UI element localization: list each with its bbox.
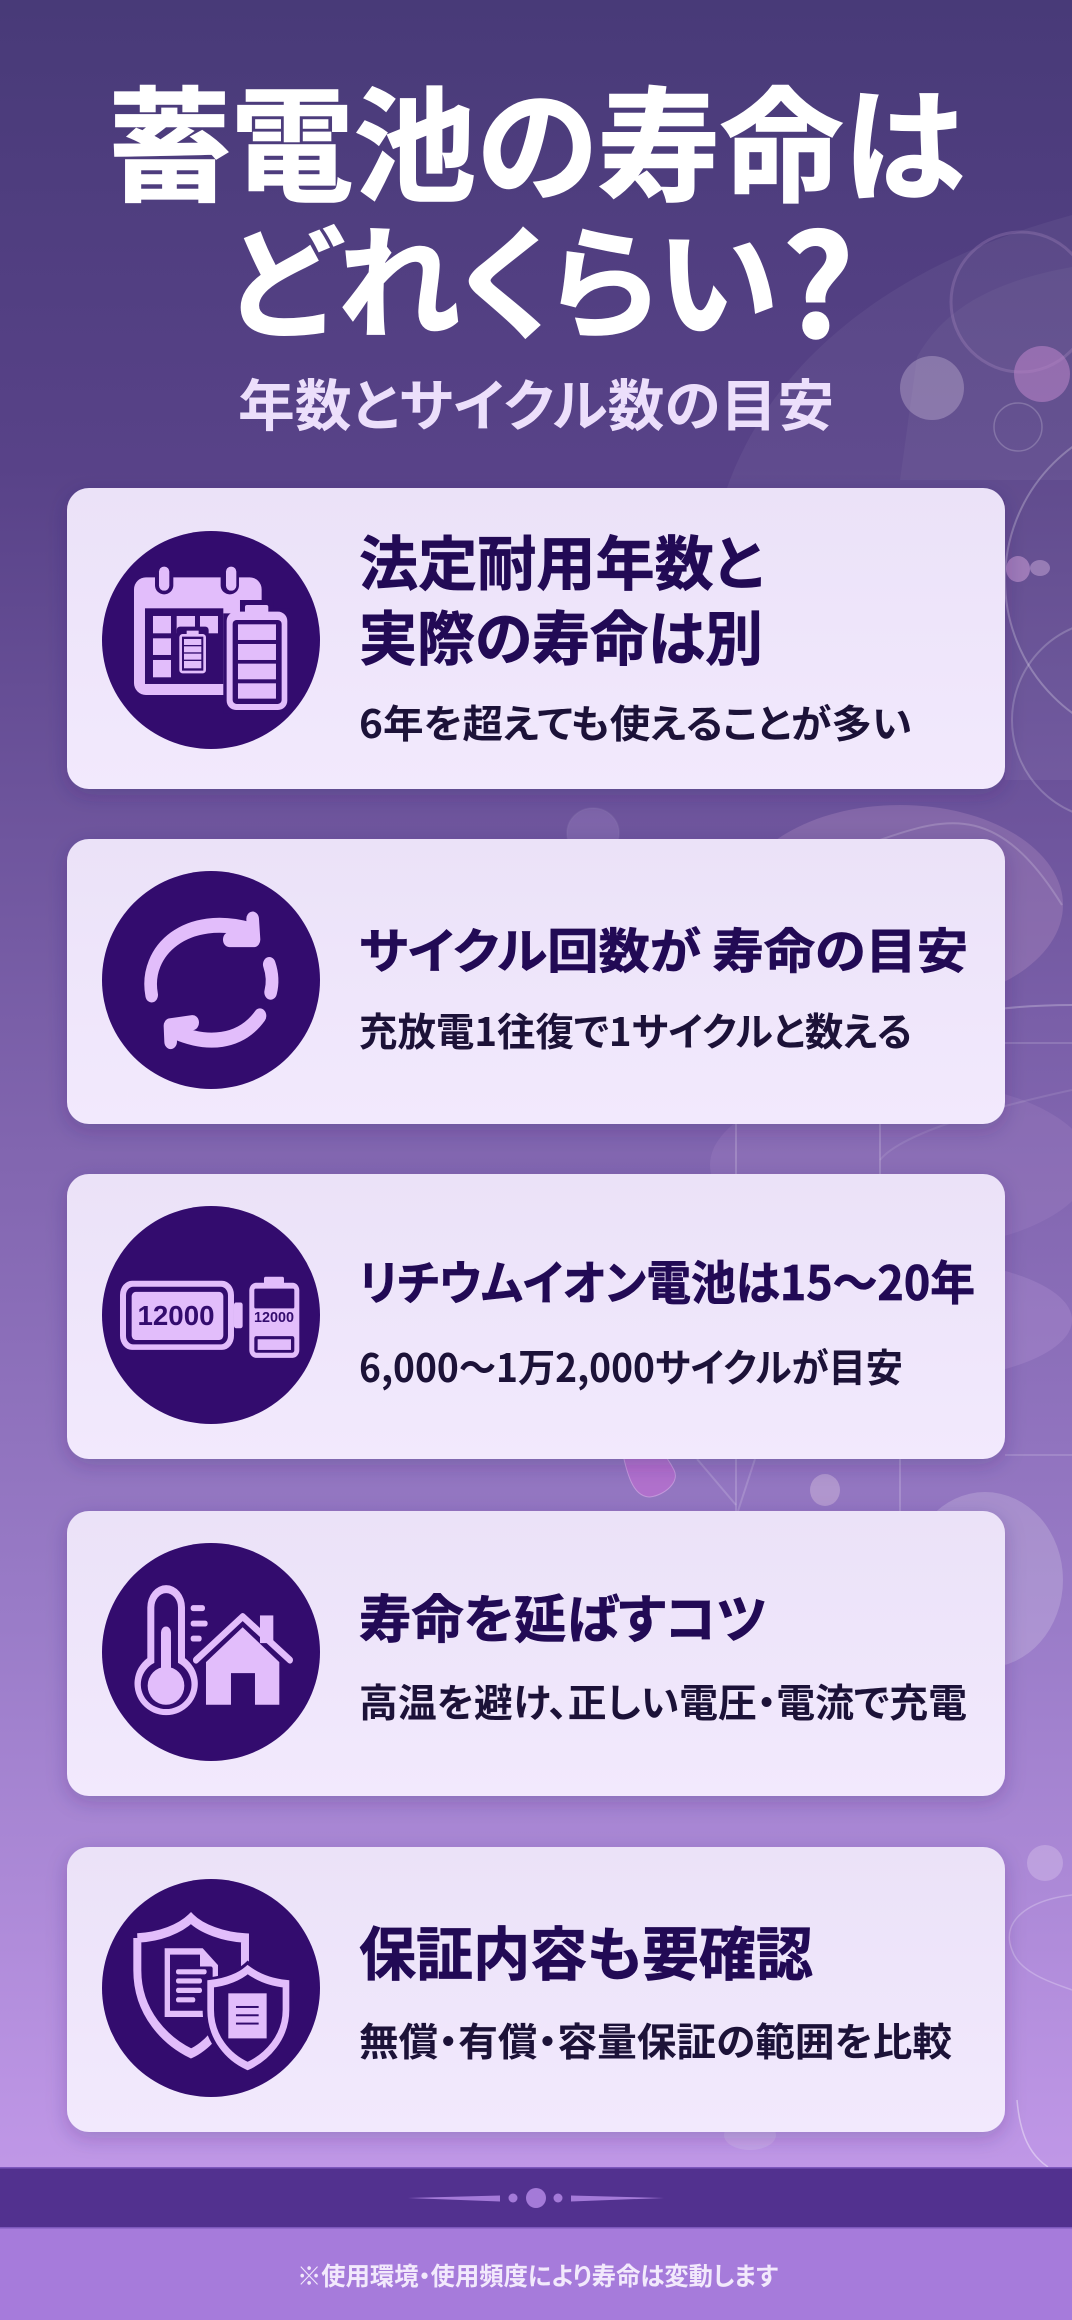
icon: cycle arrows	[102, 871, 320, 1089]
heading: 寿命を延ばすコツ	[359, 1578, 767, 1653]
icon: batteries 12000	[102, 1206, 320, 1424]
footer band with ornament	[0, 2167, 1072, 2227]
icon: batteries 12000: 12000	[254, 1310, 294, 1326]
title: ?	[782, 176, 854, 378]
footnote text: ※使用環境・使用頻度により寿命は変動します	[297, 2257, 778, 2293]
heading: 法定耐用年数と	[359, 517, 763, 602]
panel: tips to extend life	[67, 1511, 1005, 1796]
heading	[359, 517, 763, 677]
heading: サイクル回数が 寿命の目安	[359, 912, 968, 982]
heading: リチウムイオン電池は15〜20年	[359, 1245, 975, 1314]
description: 高温を避け、正しい電圧・電流で充電	[359, 1673, 967, 1729]
title: どれくらい	[228, 187, 778, 364]
title	[108, 47, 964, 378]
icon: shields and documents	[102, 1879, 320, 2097]
footnote bar	[0, 2227, 1072, 2320]
icon: thermometer and house	[102, 1543, 320, 1761]
description: 充放電1往復で1サイクルと数える	[359, 1002, 912, 1058]
panel: cycle count	[67, 839, 1005, 1124]
heading: 実際の寿命は別	[359, 592, 763, 677]
panel: legal life vs actual life	[67, 488, 1005, 789]
description: 無償・有償・容量保証の範囲を比較	[359, 2012, 952, 2068]
title: 蓄電池の寿命は	[108, 47, 964, 227]
description: 6,000〜1万2,000サイクルが目安	[359, 1338, 903, 1394]
heading: 保証内容も要確認	[359, 1908, 813, 1992]
description: 6年を超えても使えることが多い	[359, 694, 912, 750]
icon: batteries 12000: 12000	[138, 1300, 214, 1331]
subtitle: 年数とサイクル数の目安	[238, 362, 834, 443]
panel: warranty	[67, 1847, 1005, 2132]
icon: calendar and battery	[102, 531, 320, 749]
panel: lithium ion life	[67, 1174, 1005, 1459]
